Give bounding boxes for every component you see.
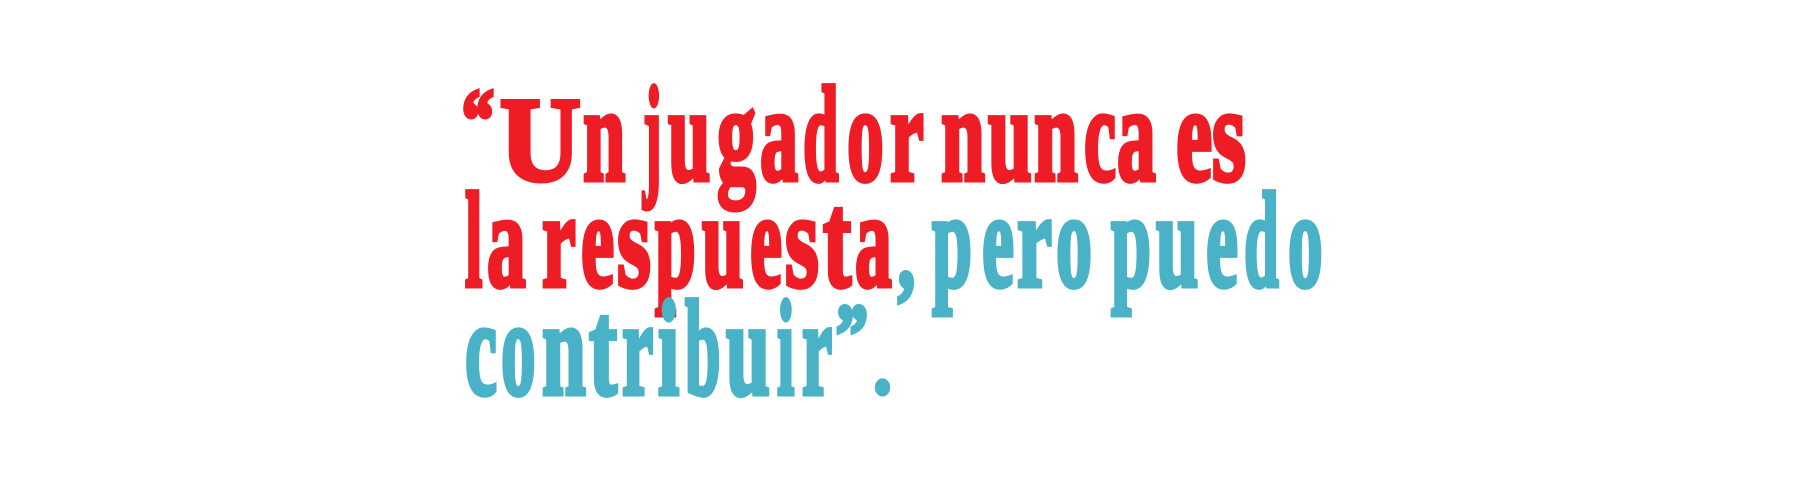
quote line 3, blue: c [465,274,497,424]
quote line 1, red: a [760,60,798,210]
quote line 2, red part: t [823,166,851,316]
quote line 1, red: a [1117,60,1156,210]
quote line 1, red: c [1084,60,1116,210]
quote line 2, blue part: o [1288,166,1323,316]
quote line 2, red part: e [581,166,614,316]
quote line 2, blue part: e [982,166,1014,316]
quote line 2, red part: r [542,166,576,316]
quote line 2, blue part: p [932,166,972,316]
quote line 3, blue: o [501,274,536,424]
quote line 2, blue part: e [1206,166,1238,316]
quote line 2, blue part: o [1056,166,1092,316]
quote line 2, blue part [897,166,1323,318]
quote line 1, red: s [1212,60,1246,210]
quote line 3, blue: . [874,323,891,411]
quote line 2, red part: s [617,166,651,316]
quote line 1, red: d [803,60,839,210]
quote line 2, blue part: r [1017,166,1052,316]
quote line 2, red part: a [855,166,892,316]
quote line 3, blue [465,274,891,424]
quote line 1, red: n [941,60,985,210]
quote line 3, blue: i [658,274,679,424]
quote line 1, red: n [583,60,625,210]
quote line 2, red part [465,166,892,318]
quote line 1, red [462,60,1246,212]
quote line 2, red part: l [465,166,482,316]
quote line 1, red: “ [462,73,494,167]
quote line 1, red: j [643,60,662,210]
quote line 3, blue: ” [836,288,868,382]
quote line 2, blue part: , [898,198,915,309]
quote line 3, blue: n [542,274,586,424]
quote line 1, red: o [847,60,884,210]
quote line 1, red: e [1176,60,1212,210]
quote line 2, red part: u [702,166,744,316]
quote line 3, blue: b [685,274,721,424]
quote line 3, blue: i [777,274,794,424]
quote line 1, red: u [988,60,1032,210]
quote line 1, red: g [717,60,756,210]
quote line 2, red part: e [750,166,782,316]
quote line 2, red part: a [487,166,526,316]
quote line 2, red part: s [785,166,819,316]
quote line 1, red: n [1034,60,1078,210]
quote line 1, red: u [668,60,710,210]
quote line 3, blue: r [622,274,653,424]
quote line 1, red: U [500,73,581,206]
quote line 3, blue: u [726,274,770,424]
quote line 3, blue: t [589,274,617,424]
quote line 2, red part: p [655,166,696,316]
quote line 2, blue part: u [1156,166,1198,316]
quote line 2, blue part: p [1111,166,1151,316]
quote line 1, red: r [890,60,924,210]
quote line 3, blue: r [802,274,832,424]
quote line 2, blue part: d [1244,166,1279,316]
